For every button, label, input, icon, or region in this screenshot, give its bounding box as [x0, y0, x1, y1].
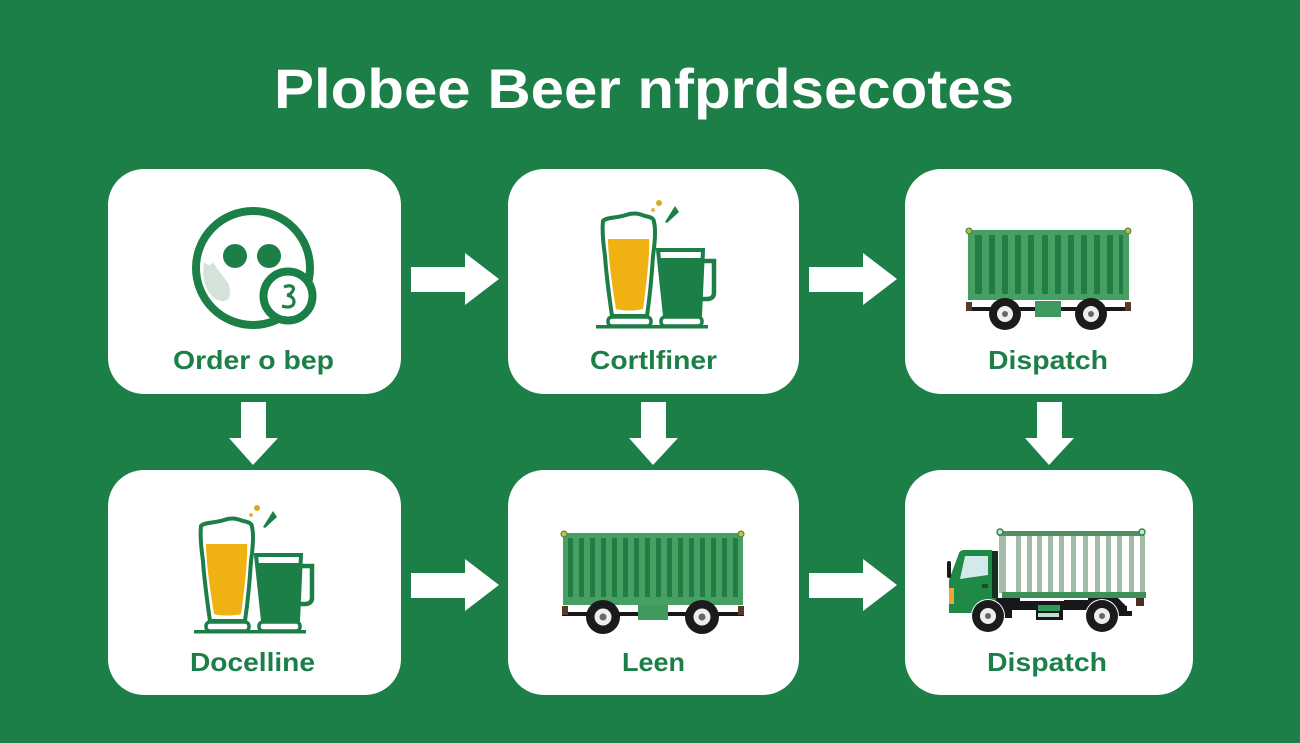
label: dispatch top: Dispatch: [988, 345, 1108, 375]
icon: beer glasses: [596, 200, 714, 328]
icon: container trailer: [561, 531, 744, 634]
title: Plobee Beer nfprdsecotes: [274, 57, 1014, 120]
label: cortlfiner step: Cortlfiner: [590, 345, 717, 375]
icon: beer glasses: [194, 505, 312, 634]
icon: container trailer: [966, 228, 1131, 330]
panel: order step: [108, 169, 401, 394]
label: leen step: Leen: [622, 647, 685, 677]
arrow: cortlfiner to dispatch: [809, 253, 897, 305]
icon: delivery truck: [947, 529, 1146, 633]
label: docelline step: Docelline: [190, 647, 315, 677]
panel: cortlfiner step: [508, 169, 799, 394]
arrow: cortlfiner down to leen: [629, 402, 678, 465]
arrow: dispatch down to dispatch: [1025, 402, 1074, 465]
panel: dispatch step bottom: [905, 470, 1193, 695]
panel: leen step: [508, 470, 799, 695]
panel: dispatch step top: [905, 169, 1193, 394]
arrow: leen to dispatch: [809, 559, 897, 611]
label: order step: Order o bep: [173, 345, 334, 375]
panel: docelline step: [108, 470, 401, 695]
icon: order face badge: [196, 211, 312, 325]
arrow: docelline to leen: [411, 559, 499, 611]
arrow: order down to docelline: [229, 402, 278, 465]
arrow: order to cortlfiner: [411, 253, 499, 305]
label: dispatch bottom: Dispatch: [987, 647, 1107, 677]
